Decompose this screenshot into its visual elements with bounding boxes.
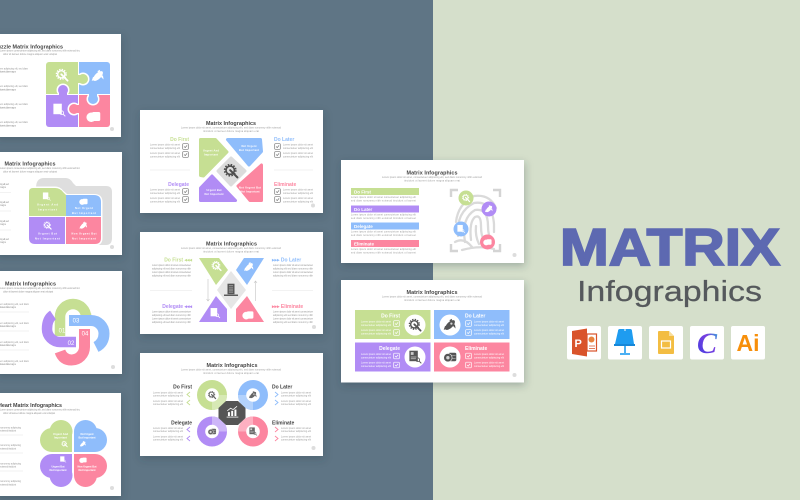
left text: do first [150,137,189,158]
knot slide text rows: em adipiscing elit, sed diam [0,360,29,363]
folder slide text rows: magna [0,223,7,226]
left text: delegate [150,182,189,204]
puzzle slide intro [0,50,81,56]
heart clover chart: Important [54,436,67,440]
circles chart [197,380,268,446]
text: eliminate [271,304,314,324]
hourglass slide intro: Lorem ipsum dolor sit amet, consectetuer adipiscing elit, sed diam nonummy nibh euismod [181,247,282,250]
heading: hourglass slide: Matrix Infographics [206,242,257,248]
circles slide intro: Lorem ipsum dolor sit amet, consectetuer adipiscing elit, sed diam nonummy nibh euismod [181,368,282,372]
heart clover chart: Not Important [78,468,96,472]
footer icon [312,446,316,450]
knot slide text rows: laoreet dolore magna [0,363,17,366]
card: do first: consectetuer adipiscing elit [361,332,391,336]
left text: delegate: Lorem ipsum dolor sit amet [150,188,180,192]
text: eliminate: Lorem ipsum dolor sit amet consectetuer [273,318,313,320]
panel: fingerprint matrix slide [341,160,524,263]
panel: circles matrix slide [140,353,323,456]
text: do later: ▸▸▸ Do Later [271,258,301,264]
text: do later: adipiscing elit sed diam nonummy nibh [273,274,314,278]
knot chart [47,304,104,360]
cards slide intro [382,296,483,302]
card: delegate: Lorem ipsum dolor sit amet [361,353,391,356]
panel: hourglass matrix slide [140,232,323,334]
text: delegate: Delegate ◂◂◂ [162,304,192,310]
text: do first: Lorem ipsum dolor sit amet [153,392,183,394]
text: do later: adipiscing elit sed diam nonummy nibh [273,268,314,270]
bar: do later: sed diam nonummy nibh euismod tincidunt ut laoreet [351,217,416,220]
text: do later: Do Later [272,384,292,390]
folder chart: Non Urgent But [72,232,97,236]
text: eliminate: consectetuer adipiscing elit [281,438,311,442]
hourglass slide intro [181,247,282,254]
heart slide text rows: euismod tincidunt [0,484,16,486]
card: eliminate: Lorem ipsum dolor sit amet [474,362,504,364]
left text: do first: consectetuer adipiscing elit [150,147,180,150]
text: do later: Lorem ipsum dolor sit amet [281,392,311,394]
text: eliminate: Eliminate [272,420,294,426]
folder slide text rows: ing elit, sed [0,220,10,223]
footer icon [110,486,114,490]
quadrant chart: Important [204,152,218,156]
icon: google slides [649,326,683,360]
footer icon [111,365,115,369]
puzzle slide text rows: em adipiscing elit, sed diam [0,121,28,124]
left background [0,0,433,500]
text: eliminate [272,420,311,442]
heart slide text rows: nonummy adipiscing [0,444,22,447]
heart slide text rows: euismod tincidunt [0,430,16,432]
text: delegate [153,420,192,442]
knot slide intro [0,287,81,294]
folder slide text rows: magna [0,241,7,244]
card: do later: Do Later [465,314,485,320]
puzzle slide text rows: laoreet dolore magna [0,88,17,92]
text: delegate: Lorem ipsum dolor sit amet [153,436,183,438]
bar: do first [351,188,419,202]
footer icon [110,127,114,131]
text: delegate: consectetuer adipiscing elit [153,438,183,442]
bar: do first: Lorem ipsum dolor sit amet consectetuer adipiscing elit [351,196,416,199]
footer icon [311,204,315,208]
text: do first: Lorem ipsum dolor sit amet [153,400,183,403]
left text: delegate: Lorem ipsum dolor sit amet [150,197,180,200]
puzzle slide text rows: laoreet dolore magna [0,70,17,74]
knot slide text rows: em adipiscing elit, sed diam [0,322,29,325]
right text: eliminate: consectetuer adipiscing elit [283,200,313,204]
right background [433,0,800,500]
heart slide intro: Lorem ipsum consectetuer adipiscing elit, sed diam nonummy nibh euismod tinc [0,408,81,412]
card: eliminate: Eliminate [465,346,487,352]
card: do first: Do First [381,314,400,320]
quadrant chart: Urgent And [203,148,219,152]
left text: delegate: Delegate [168,182,189,188]
folder slide intro [0,167,81,174]
cards slide intro: tincidunt ut laoreet dolore magna aliquam erat [404,299,460,302]
card: eliminate: Lorem ipsum dolor sit amet [474,353,504,356]
puzzle slide text rows: laoreet dolore magna [0,124,17,128]
bar: delegate: Lorem ipsum dolor sit amet consectetuer adipiscing elit [351,230,416,234]
bar: eliminate: sed diam nonummy nibh euismod tincidunt ut laoreet [351,252,416,254]
footer icon [512,373,516,377]
text: do later: Lorem ipsum dolor sit amet [281,400,311,403]
quadrant chart: Not Important [204,192,224,196]
folder chart: Not Urgent [75,206,93,210]
heart slide text rows: euismod tincidunt [0,466,16,468]
text: delegate: consectetuer adipiscing elit [153,430,183,433]
knot chart: 04 [82,332,89,338]
text: do first: adipiscing elit sed diam nonummy nibh [152,274,192,278]
text: delegate: Lorem ipsum dolor sit amet consectetuer [152,310,191,314]
puzzle slide text rows: em adipiscing elit, sed diam [0,68,28,70]
text: delegate: adipiscing elit sed diam nonummy nibh [152,314,192,317]
card: delegate: Lorem ipsum dolor sit amet [361,362,391,364]
quadrant chart: But Important [239,148,259,152]
heart clover chart: Not Important [50,468,67,472]
bar: do first: sed diam nonummy nibh euismod tincidunt ut laoreet [351,200,416,202]
text: do later: consectetuer adipiscing elit [281,403,311,406]
folder chart: Not Important [35,236,60,240]
fingerprint chart [451,190,500,251]
knot chart: 02 [68,341,75,347]
card: eliminate: consectetuer adipiscing elit [474,356,504,360]
circles slide intro [181,368,282,375]
text: do later: Lorem ipsum dolor sit amet consectetuer [273,271,313,274]
icon: illustrator: Ai [736,330,760,356]
left text: do first: consectetuer adipiscing elit [150,156,180,158]
slide collection [0,34,524,496]
heading: folder slide: Matrix Infographics [4,162,56,168]
folder slide text rows: magna [0,186,7,189]
bar: do first: Do First [354,190,372,194]
puzzle slide text rows: em adipiscing elit, sed diam [0,103,28,106]
puzzle slide text rows: em adipiscing elit, sed diam [0,85,28,88]
folder slide intro: Lorem ipsum consectetuer adipiscing elit, sed diam nonummy nibh euismod tinc [0,167,81,170]
cards slide intro: Lorem ipsum dolor sit amet, consectetuer adipiscing elit, sed diam nonummy nibh euismod [382,296,483,298]
text: do first: Do First ◂◂◂ [164,258,192,264]
text: eliminate: Lorem ipsum dolor sit amet [281,436,311,438]
text: eliminate: consectetuer adipiscing elit [281,430,311,433]
card: do first: Lorem ipsum dolor sit amet [361,320,391,324]
knot slide text rows: laoreet dolore magna [0,306,17,309]
card: eliminate: consectetuer adipiscing elit [474,365,504,368]
circles slide intro: tincidunt ut laoreet dolore magna aliquam erat [203,372,259,375]
heading: fingerprint slide: Matrix Infographics [406,170,458,176]
right text: eliminate: Eliminate [274,182,296,188]
bar: delegate: Delegate [354,224,373,229]
knot slide text rows: em adipiscing elit, sed diam [0,341,29,344]
card: do first [355,310,430,339]
folder chart: Not Important [72,236,96,240]
left text: delegate: consectetuer adipiscing elit [150,192,180,195]
text: do first: consectetuer adipiscing elit [153,403,183,406]
quadrant slide intro: tincidunt ut laoreet dolore magna aliquam erat [203,130,259,133]
text: do first: consectetuer adipiscing elit [153,394,183,398]
icon: illustrator [731,326,765,360]
quadrant chart: Not Important [240,190,260,194]
icon: keynote [608,326,642,360]
text: do later [272,384,311,406]
quadrant chart: Urgent But [206,188,222,192]
text: delegate: adipiscing elit sed diam nonummy nibh [152,321,192,324]
hourglass chart [199,258,264,322]
bar: do later: Do Later [354,207,373,212]
footer icon [110,245,114,249]
folder slide text rows: ing elit, sed [0,183,10,186]
heading: cards slide: Matrix Infographics [406,290,458,296]
footer icon [512,253,516,257]
card: do later: consectetuer adipiscing elit [474,332,504,336]
heart clover chart: Non Urgent But [78,464,97,468]
knot slide text rows: laoreet dolore magna [0,344,17,347]
text: delegate: Lorem ipsum dolor sit amet consectetuer [152,318,191,320]
folder chart: But Important [72,211,96,215]
heart slide text rows [0,426,23,486]
text: do later [271,258,314,278]
right text: do later [274,137,313,158]
text: eliminate: Lorem ipsum dolor sit amet [281,427,311,430]
text: delegate: Delegate [171,420,192,426]
card: delegate: Delegate [379,346,400,352]
folder slide text rows: ing elit, sed [0,238,10,241]
bar: delegate [351,222,419,237]
text: eliminate: adipiscing elit sed diam nonummy nibh [273,314,314,317]
knot chart: 01 [59,328,66,334]
folder chart: Urgent And [37,202,58,206]
text: do later: Lorem ipsum dolor sit amet consectetuer [273,264,313,267]
heart slide intro [0,408,81,415]
heart slide intro: dolor sit laoreet dolore magna aliquam erat volutpat [3,412,55,415]
footer icon [312,325,316,329]
heart clover chart: Urgent But [52,464,65,468]
icon: powerpoint [567,326,601,360]
text: delegate: Lorem ipsum dolor sit amet [153,427,183,430]
puzzle slide intro: Lorem ipsum consectetuer adipiscing elit, sed diam nonummy nibh euismod tinc [0,50,81,52]
panel: heart matrix slide [0,393,121,496]
fingerprint slide intro [382,176,483,182]
right text: do later: Lorem ipsum dolor sit amet [283,152,313,155]
heading: knot slide: Matrix Infographics [5,282,56,288]
card: do later: consectetuer adipiscing elit [474,324,504,327]
left text: delegate: consectetuer adipiscing elit [150,200,180,204]
knot slide intro: dolor sit laoreet dolore magna aliquam erat volutpat [3,290,53,294]
right text: do later: Do Later [274,137,294,143]
knot slide text rows: em adipiscing elit, sed diam [0,303,29,306]
bar: do later [351,206,419,220]
card: do first: consectetuer adipiscing elit [361,324,391,327]
folder chart: Important [38,208,57,212]
heart clover chart: Urgent And [53,432,68,436]
folder slide text rows: magna [0,204,7,207]
heart slide text rows: nonummy adipiscing [0,480,22,483]
folder chart [28,178,112,246]
panel: puzzle matrix slide [0,34,121,137]
text: delegate [152,304,192,324]
text: do first: adipiscing elit sed diam nonummy nibh [152,268,192,270]
card: delegate: consectetuer adipiscing elit [361,356,391,360]
heading: quadrant slide: Matrix Infographics [206,121,256,127]
text: eliminate: adipiscing elit sed diam nonummy nibh [273,321,314,324]
puzzle slide text rows [0,68,28,128]
right text: eliminate [274,182,313,204]
panel: folder matrix slide [0,152,122,255]
folder chart: Urgent But [38,232,57,236]
right text: eliminate: Lorem ipsum dolor sit amet [283,188,313,192]
panel: quadrant matrix slide [140,110,323,213]
left text: do first: Lorem ipsum dolor sit amet [150,152,180,155]
card: do later: Lorem ipsum dolor sit amet [474,320,504,324]
left text: do first: Do First [170,137,189,143]
quadrant chart [200,140,262,200]
heart clover chart: Not Urgent [80,432,94,436]
bar: eliminate [351,240,419,254]
text: do first: Lorem ipsum dolor sit amet consectetuer [152,271,191,274]
panel: cards matrix slide [341,280,524,382]
knot slide intro: Lorem ipsum consectetuer adipiscing elit, sed diam nonummy nibh euismod tinc [0,287,81,290]
text: do first: Do First [173,384,192,390]
subtitle: Infographics [577,276,762,308]
bar: do later: Lorem ipsum dolor sit amet consectetuer adipiscing elit [351,214,416,216]
heading: circles slide: Matrix Infographics [206,363,258,369]
bar: eliminate: Eliminate [354,242,375,246]
text: eliminate: ▸▸▸ Eliminate [271,304,303,310]
heart slide text rows: nonummy adipiscing [0,462,22,466]
card: eliminate [434,342,510,372]
fingerprint slide intro: Lorem ipsum dolor sit amet, consectetuer adipiscing elit, sed diam nonummy nibh euismod [382,176,483,179]
card: delegate [355,342,430,372]
fingerprint slide intro: tincidunt ut laoreet dolore magna aliquam erat [404,180,460,182]
card: do first: Lorem ipsum dolor sit amet [361,329,391,332]
text: eliminate: Lorem ipsum dolor sit amet consectetuer [273,310,313,314]
quadrant slide intro [181,126,282,133]
puzzle slide text rows: laoreet dolore magna [0,106,17,110]
quadrant chart: Not Urgent But [239,186,261,190]
main title: MATRIX [560,219,780,277]
bar: delegate: sed diam nonummy nibh euismod tincidunt ut laoreet [351,234,416,237]
knot slide text rows: laoreet dolore magna [0,325,17,328]
heart slide text rows: euismod tincidunt [0,448,16,450]
icon: powerpoint: P [574,338,582,350]
icon: canva [690,326,724,360]
folder slide text rows: ing elit, sed [0,201,10,204]
bar: eliminate: Lorem ipsum dolor sit amet consectetuer adipiscing elit [351,248,416,251]
puzzle slide intro: dolor sit laoreet dolore magna aliquam erat volutpat [3,53,57,56]
right text: eliminate: Lorem ipsum dolor sit amet [283,197,313,200]
quadrant slide intro: Lorem ipsum dolor sit amet, consectetuer adipiscing elit, sed diam nonummy nibh euismod [181,126,282,130]
left text: do first: Lorem ipsum dolor sit amet [150,144,180,146]
knot slide text rows [0,303,29,366]
knot chart: 03 [73,318,80,324]
text: do first [153,384,192,406]
quadrant chart: Not Urgent [242,144,257,148]
right text: do later: consectetuer adipiscing elit [283,156,313,158]
folder slide intro: dolor sit laoreet dolore magna aliquam erat volutpat [3,170,57,174]
heart clover chart: But Important [78,436,96,440]
puzzle chart [46,62,110,127]
text: do first [152,258,192,278]
right text: do later: consectetuer adipiscing elit [283,147,313,150]
text: do first: Lorem ipsum dolor sit amet consectetuer [152,264,191,267]
right text: do later: Lorem ipsum dolor sit amet [283,144,313,146]
folder slide text rows [0,183,11,244]
card: do later: Lorem ipsum dolor sit amet [474,329,504,332]
heart slide text rows: nonummy adipiscing [0,426,22,430]
card: delegate: consectetuer adipiscing elit [361,365,391,368]
text: do later: consectetuer adipiscing elit [281,394,311,398]
heart clover chart [40,420,107,487]
hourglass slide intro: tincidunt ut laoreet dolore magna aliquam erat [203,250,259,254]
card: do later [434,310,510,339]
panel: knot matrix slide [0,271,122,374]
right text: eliminate: consectetuer adipiscing elit [283,192,313,195]
icon: canva: C [697,327,718,360]
